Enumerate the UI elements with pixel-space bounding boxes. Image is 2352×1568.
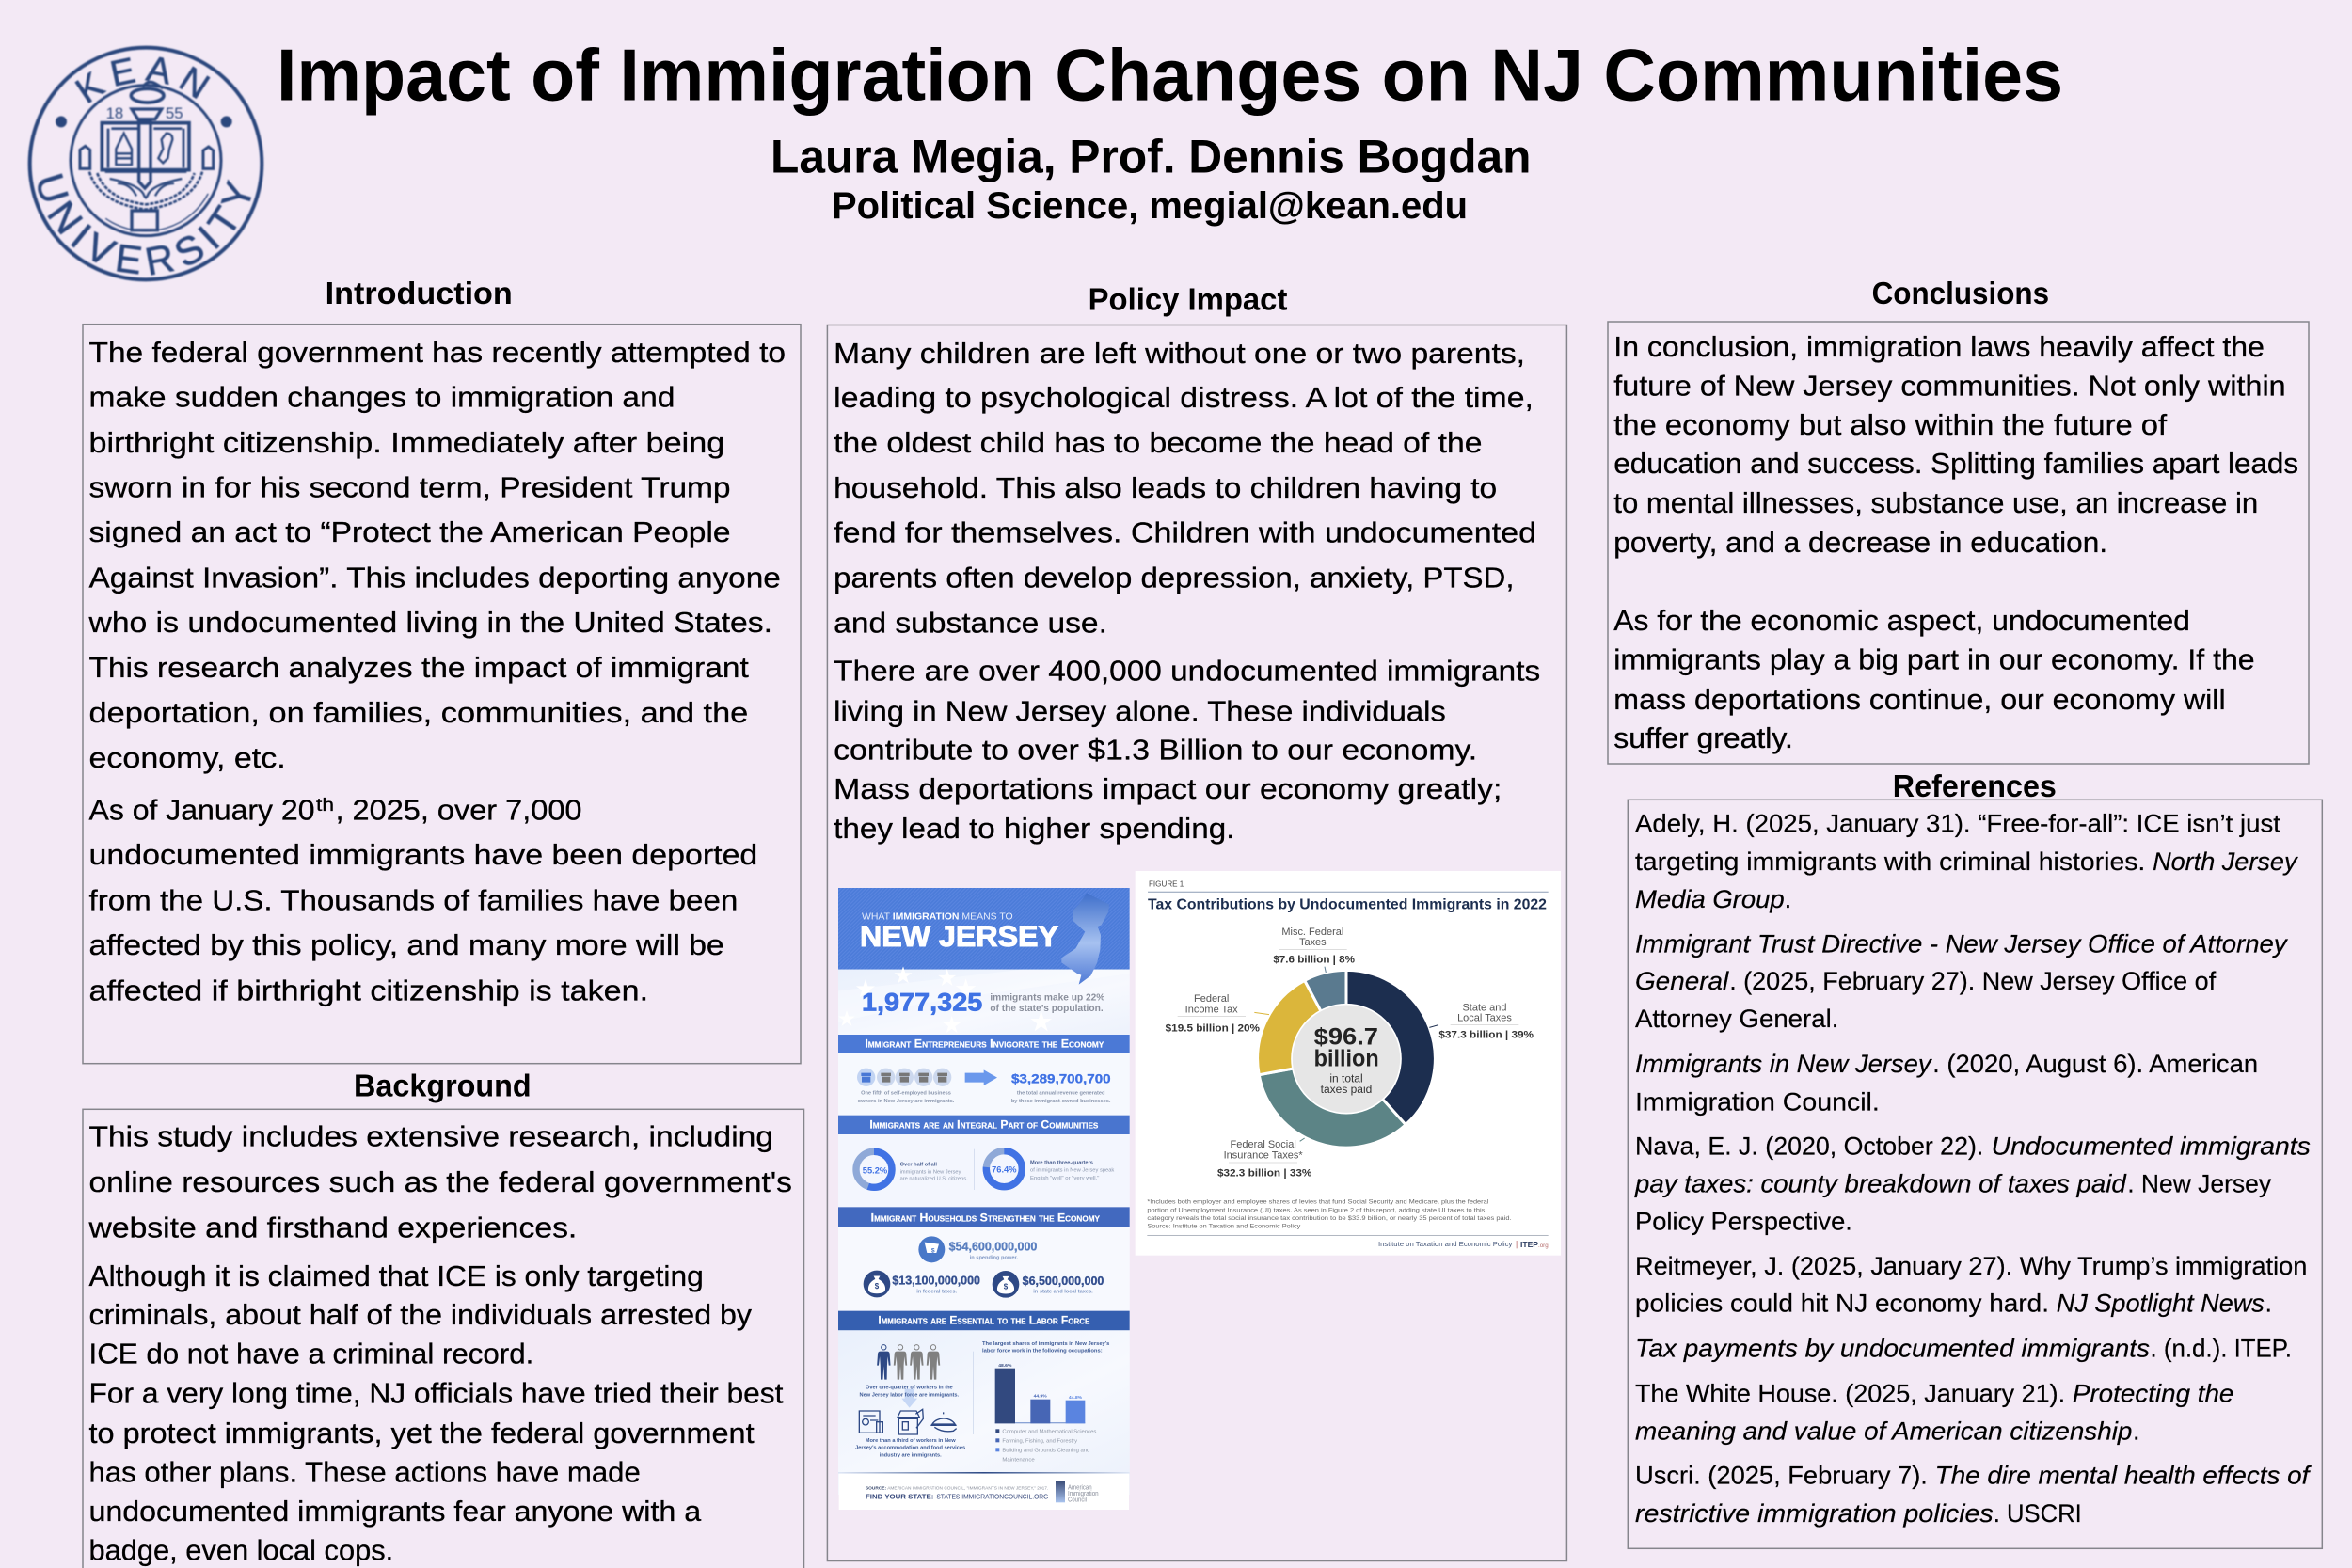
background text: to protect immigrants, yet the federal government	[88, 1417, 755, 1449]
chart legend: Computer and Mathematical Sciences	[1002, 1429, 1097, 1434]
references list	[1634, 810, 2312, 1528]
references list: restrictive immigration policies	[1635, 1499, 1994, 1528]
logo: Kean University seal: 18	[106, 104, 123, 122]
label: state and local taxes: Local Taxes	[1457, 1013, 1512, 1024]
donut: naturalized citizens 55.2%: 55.2%	[863, 1165, 888, 1175]
donut: naturalized citizens 55.2%	[856, 1151, 892, 1187]
icon: business owners	[857, 1069, 951, 1086]
policy impact text: parents often develop depression, anxiety, PTSD,	[834, 562, 1515, 594]
conclusions text: education and success. Splitting families apart leads	[1613, 447, 2298, 480]
policy impact text: household. This also leads to children having to	[834, 471, 1497, 504]
background text: badge, even local cops.	[88, 1533, 393, 1566]
conclusions text: suffer greatly.	[1613, 721, 1793, 754]
label: misc federal taxes	[1273, 927, 1355, 973]
title: Impact of Immigration Changes on NJ Communities	[277, 34, 2063, 117]
background text: Although it is claimed that ICE is only targeting	[88, 1259, 704, 1292]
heading: policy impact: Policy Impact	[1089, 282, 1287, 317]
introduction text: As of January 20	[88, 793, 314, 826]
introduction text: Against Invasion”. This includes deporting anyone	[88, 561, 781, 594]
conclusions text: mass deportations continue, our economy will	[1613, 683, 2226, 716]
section: communities	[838, 1116, 1130, 1207]
label: federal social insurance taxes: Federal Social	[1231, 1139, 1296, 1150]
background text: online resources such as the federal government's	[88, 1165, 792, 1198]
figure footnote: Institute on Taxation and Economic Policy	[1378, 1242, 1513, 1248]
donut total: billion	[1314, 1045, 1379, 1071]
conclusions box	[1608, 322, 2309, 764]
figure footnote: .org	[1538, 1243, 1549, 1249]
references list: . New Jersey	[2127, 1169, 2272, 1197]
icon: New Jersey state map	[1061, 893, 1109, 985]
references list: . (2025, February 27). New Jersey Office of	[1729, 967, 2217, 995]
references list: Undocumented immigrants	[1992, 1132, 2311, 1161]
arrow	[965, 1069, 997, 1085]
infographic footer	[838, 1472, 1130, 1510]
logo: Kean University seal: UNIVERSITY	[37, 173, 252, 277]
policy impact text	[834, 337, 1540, 845]
policy impact text: fend for themselves. Children with undocumented	[834, 515, 1536, 549]
icon: money bag	[864, 1271, 890, 1297]
donut total	[1314, 1024, 1379, 1096]
section: households: Immigrant Households Strengthen the Economy	[871, 1211, 1101, 1224]
policy impact text: the oldest child has to become the head of the	[834, 426, 1483, 459]
background text: For a very long time, NJ officials have tried their best	[88, 1376, 784, 1409]
introduction text: This research analyzes the impact of immigrant	[88, 651, 749, 684]
introduction text: birthright citizenship. Immediately after being	[88, 426, 724, 459]
introduction text: affected if birthright citizenship is taken.	[88, 974, 648, 1006]
introduction text: deportation, on families, communities, and the	[88, 696, 748, 729]
references list: targeting immigrants with criminal histories.	[1635, 847, 2145, 876]
label: federal income tax: $19.5 billion | 20%	[1166, 1022, 1260, 1034]
label: misc federal taxes: Misc. Federal	[1281, 927, 1343, 938]
introduction text: , 2025, over 7,000	[335, 793, 581, 826]
background box	[83, 1109, 803, 1568]
section: labor force: The largest shares of immigrants in New Jersey's	[982, 1341, 1109, 1347]
label: federal social insurance taxes: $32.3 billion | 33%	[1217, 1168, 1312, 1180]
policy impact text: Mass deportations impact our economy greatly;	[834, 772, 1502, 805]
background text: criminals, about half of the individuals arrested by	[88, 1298, 753, 1331]
conclusions text: to mental illnesses, substance use, an increase in	[1613, 486, 2258, 519]
section: communities: Over half of all	[900, 1162, 937, 1167]
stat: immigrant population: 1,977,325	[862, 988, 983, 1016]
panel: references	[1628, 768, 2322, 1548]
references list: Immigration Council.	[1635, 1087, 1880, 1116]
donut: English speakers 76.4%: 76.4%	[992, 1165, 1017, 1175]
references list: . USCRI	[1994, 1499, 2082, 1528]
conclusions text: poverty, and a decrease in education.	[1613, 526, 2107, 559]
icons: occupations	[859, 1409, 957, 1434]
section: entrepreneurs	[838, 1035, 1130, 1116]
section: labor force: New Jersey labor force are immigrants.	[860, 1392, 960, 1398]
references list: The dire mental health effects of	[1935, 1462, 2312, 1490]
stat: immigrant population: immigrants make up 22%	[990, 992, 1104, 1003]
introduction text	[87, 336, 786, 1006]
references list: Immigrants in New Jersey	[1635, 1050, 1932, 1078]
introduction text: affected by this policy, and many more will be	[88, 928, 724, 961]
section: households: in state and local taxes.	[1033, 1290, 1093, 1295]
label: state and local taxes: State and	[1462, 1003, 1507, 1014]
infographic header: WHAT IMMIGRATION MEANS TO	[862, 911, 1013, 922]
references list: North Jersey	[2153, 847, 2298, 876]
panel: policy impact	[827, 282, 1566, 1561]
section: communities: Immigrants are an Integral Part of Communities	[869, 1117, 1099, 1131]
section: communities: of immigrants in New Jersey speak	[1030, 1168, 1115, 1174]
background text: ICE do not have a criminal record.	[88, 1338, 533, 1370]
chart legend: Farming, Fishing, and Forestry	[1002, 1438, 1077, 1444]
section: entrepreneurs: One fifth of self-employed business	[861, 1091, 951, 1097]
logo: Kean University seal	[26, 45, 265, 282]
references list: Media Group	[1635, 885, 1785, 913]
chart legend: Building and Grounds Cleaning and	[1002, 1448, 1089, 1453]
panel: background	[83, 1068, 803, 1568]
policy impact text: There are over 400,000 undocumented immigrants	[834, 655, 1540, 687]
background text	[87, 1120, 792, 1566]
conclusions text	[1613, 330, 2298, 754]
section: households: $6,500,000,000	[1023, 1275, 1104, 1288]
references list: pay taxes: county breakdown of taxes paid	[1634, 1169, 2127, 1197]
references list: The White House. (2025, January 21).	[1635, 1379, 2065, 1407]
introduction text: economy, etc.	[88, 741, 286, 774]
section: labor force: Immigrants are Essential to the Labor Force	[878, 1314, 1090, 1327]
references list: meaning and value of American citizenship	[1635, 1418, 2132, 1446]
label: federal income tax	[1166, 993, 1269, 1034]
figure heading	[1148, 879, 1549, 913]
section: households: in spending power.	[970, 1255, 1018, 1260]
infographic: what immigration means to New Jersey	[838, 888, 1130, 1495]
references list: NJ Spotlight News	[2057, 1290, 2265, 1318]
label: misc federal taxes: Taxes	[1299, 937, 1327, 948]
section: entrepreneurs: owners in New Jersey are immigrants.	[858, 1099, 955, 1104]
background text: undocumented immigrants fear anyone with a	[88, 1495, 702, 1528]
section: households	[838, 1207, 1130, 1311]
section: communities: English "well" or "very well."	[1030, 1176, 1099, 1181]
introduction box	[83, 325, 801, 1064]
stat: immigrant population: of the state’s population.	[990, 1004, 1104, 1014]
section: communities: are naturalized U.S. citizens.	[900, 1177, 968, 1182]
policy impact box	[827, 325, 1566, 1561]
infographic footer: American	[1068, 1484, 1092, 1491]
references list: policies could hit NJ economy hard.	[1635, 1290, 2049, 1318]
introduction text: sworn in for his second term, President Trump	[88, 470, 730, 504]
section: households: in federal taxes.	[916, 1289, 957, 1294]
section: households: $54,600,000,000	[949, 1240, 1037, 1253]
figure footnote: *Includes both employer and employee shares of levies that fund Social Security and Medicare, plus the federal	[1147, 1200, 1488, 1206]
policy impact text: contribute to over $1.3 Billion to our economy.	[834, 734, 1477, 767]
section: labor force: Jersey's accommodation and food services	[855, 1446, 965, 1451]
donut total: $96.7	[1314, 1024, 1378, 1051]
section: labor force: industry are immigrants.	[880, 1452, 942, 1458]
figure heading: Tax Contributions by Undocumented Immigrants in 2022	[1148, 897, 1547, 913]
figure heading: FIGURE 1	[1149, 879, 1184, 889]
chart legend	[995, 1429, 1097, 1463]
introduction text: who is undocumented living in the United States.	[87, 606, 772, 639]
infographic lower sections	[838, 1207, 1130, 1510]
background text: website and firsthand experiences.	[87, 1211, 577, 1243]
references list: Nava, E. J. (2020, October 22).	[1635, 1132, 1983, 1161]
label: federal income tax: Income Tax	[1185, 1004, 1238, 1015]
introduction text: th	[316, 796, 334, 816]
donut total: taxes paid	[1321, 1083, 1372, 1096]
section: communities: immigrants in New Jersey	[900, 1169, 961, 1175]
section: communities: More than three-quarters	[1030, 1161, 1093, 1166]
references box	[1628, 800, 2322, 1548]
label: state and local taxes: $37.3 billion | 39%	[1438, 1030, 1534, 1041]
label: federal income tax: Federal	[1194, 993, 1229, 1005]
infographic footer: SOURCE: AMERICAN IMMIGRATION COUNCIL, "IMMIGRANTS IN NEW JERSEY," 2017.	[866, 1486, 1048, 1492]
label: misc federal taxes: $7.6 billion | 8%	[1273, 955, 1355, 966]
references list: Attorney General.	[1635, 1005, 1838, 1033]
introduction text: undocumented immigrants have been deported	[88, 838, 757, 871]
donut total: in total	[1329, 1072, 1363, 1085]
bar chart: occupations	[995, 1363, 1085, 1423]
infographic footer: FIND YOUR STATE:	[866, 1493, 933, 1501]
icon: money bag: $	[875, 1282, 880, 1291]
icon: money bag: $	[1004, 1282, 1009, 1291]
icon: shopping cart	[918, 1236, 945, 1262]
infographic footer: Council	[1068, 1497, 1087, 1504]
section: entrepreneurs: $3,289,700,700	[1011, 1071, 1111, 1086]
conclusions text: the economy but also within the future of	[1613, 408, 2168, 441]
background text: has other plans. These actions have made	[88, 1455, 641, 1488]
bar chart: occupations: 48.6%	[998, 1363, 1012, 1369]
figure footnote: Source: Institute on Taxation and Economic Policy	[1147, 1225, 1300, 1230]
references list: . (n.d.). ITEP.	[2151, 1335, 2292, 1363]
label: federal social insurance taxes: Insurance Taxes*	[1224, 1149, 1303, 1161]
panel: conclusions	[1608, 276, 2309, 764]
policy impact text: leading to psychological distress. A lot of the time,	[834, 381, 1534, 414]
section: labor force: More than a third of workers in New	[866, 1438, 956, 1444]
conclusions text: As for the economic aspect, undocumented	[1613, 604, 2190, 637]
section: labor force: Over one-quarter of workers in the	[866, 1385, 953, 1390]
section: entrepreneurs: by these immigrant-owned businesses.	[1011, 1099, 1111, 1104]
panel: introduction	[83, 276, 801, 1064]
bar chart: occupations: 44.8%	[1069, 1395, 1083, 1401]
section: households: $13,100,000,000	[892, 1275, 980, 1288]
infographic footer: Immigration	[1068, 1491, 1099, 1497]
heading: introduction: Introduction	[326, 276, 513, 310]
references list: .	[2133, 1418, 2140, 1446]
section: entrepreneurs: the total annual revenue generated	[1017, 1091, 1105, 1097]
infographic header: NEW JERSEY	[860, 919, 1058, 953]
arrow	[901, 1389, 917, 1408]
section: labor force	[838, 1311, 1130, 1473]
section: labor force: labor force work in the following occupations:	[982, 1349, 1103, 1354]
introduction text: from the U.S. Thousands of families have been	[88, 883, 738, 916]
bar chart: occupations: 44.9%	[1034, 1394, 1047, 1400]
references list: Immigrant Trust Directive - New Jersey Office of Attorney	[1635, 929, 2288, 958]
figure footnote: ITEP	[1520, 1240, 1538, 1249]
figure footnote: category reveals the total social insurance tax contribution to be $33.9 billion, or nearly 35 percent of total taxes paid.	[1147, 1216, 1512, 1222]
section: entrepreneurs: Immigrant Entrepreneurs Invigorate the Economy	[865, 1037, 1104, 1050]
label: state and local taxes	[1429, 1003, 1534, 1041]
references list: Uscri. (2025, February 7).	[1635, 1462, 1928, 1490]
references list: Tax payments by undocumented immigrants	[1635, 1335, 2150, 1363]
infographic footer: STATES.IMMIGRATIONCOUNCIL.ORG	[936, 1495, 1048, 1501]
heading: references: References	[1893, 768, 2057, 803]
policy impact text: living in New Jersey alone. These individuals	[834, 694, 1446, 727]
references list: General	[1635, 967, 1729, 995]
introduction text: The federal government has recently attempted to	[88, 336, 786, 369]
logo: Kean University seal: 55	[166, 104, 183, 122]
infographic header	[838, 888, 1130, 970]
authors: Laura Megia, Prof. Dennis Bogdan	[771, 130, 1532, 182]
policy impact text: Many children are left without one or two parents,	[834, 337, 1525, 370]
references list: Adely, H. (2025, January 31). “Free-for-all”: ICE isn’t just	[1635, 810, 2280, 838]
policy impact text: and substance use.	[834, 606, 1107, 639]
introduction text: signed an act to “Protect the American People	[88, 515, 730, 548]
icon: money bag	[993, 1271, 1019, 1298]
references list: . (2020, August 6). American	[1932, 1050, 2258, 1078]
heading: conclusions: Conclusions	[1872, 276, 2049, 310]
figure: tax contributions by undocumented immigrants	[1136, 871, 1561, 1256]
background text: This study includes extensive research, including	[88, 1120, 773, 1153]
stat: immigrant population	[838, 966, 1130, 1035]
chart legend: Maintenance	[1002, 1457, 1035, 1463]
references list: Protecting the	[2073, 1379, 2233, 1407]
icon: workers	[877, 1345, 940, 1380]
references list: Reitmeyer, J. (2025, January 27). Why Trump’s immigration	[1635, 1252, 2307, 1280]
conclusions text: In conclusion, immigration laws heavily affect the	[1613, 330, 2265, 363]
conclusions text: future of New Jersey communities. Not only within	[1613, 369, 2286, 402]
icon: shopping cart: $	[931, 1248, 935, 1255]
introduction text: make sudden changes to immigration and	[88, 380, 675, 414]
references list: .	[1785, 885, 1791, 913]
figure footnote: portion of Unemployment Insurance (UI) taxes. As seen in Figure 2 of this report, adding state UI taxes to this	[1147, 1208, 1485, 1213]
donut chart	[1258, 970, 1435, 1148]
affiliation: Political Science, megial@kean.edu	[832, 185, 1468, 227]
references list: .	[2265, 1290, 2272, 1318]
policy impact text: they lead to higher spending.	[834, 812, 1234, 845]
donut: English speakers 76.4%	[986, 1151, 1022, 1187]
figure footnote	[1147, 1200, 1549, 1249]
references list: Policy Perspective.	[1635, 1208, 1852, 1236]
logo: Kean University seal: KEAN	[73, 56, 211, 104]
label: federal social insurance taxes	[1217, 1138, 1312, 1180]
heading: background: Background	[354, 1068, 532, 1102]
conclusions text: immigrants play a big part in our economy. If the	[1613, 643, 2255, 676]
